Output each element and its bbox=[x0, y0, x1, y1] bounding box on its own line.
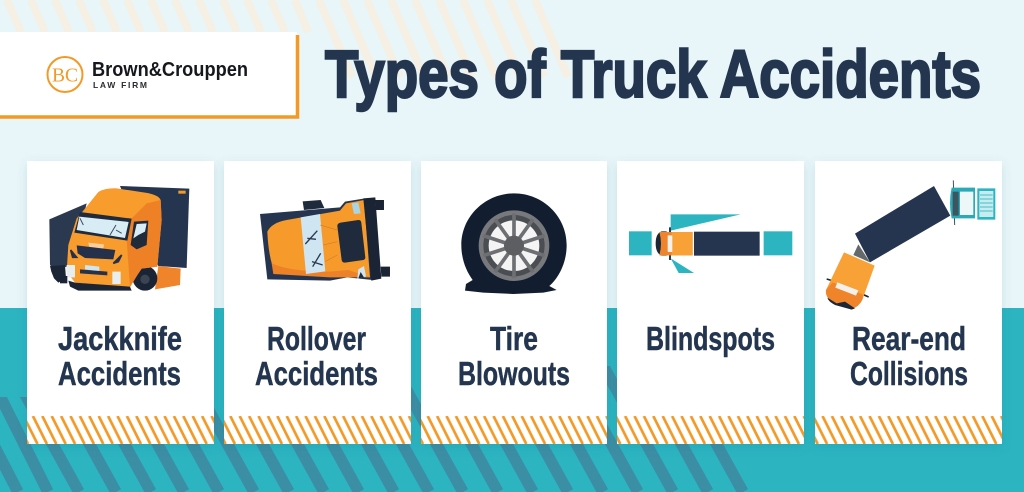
label: Rollover Accidents: Rollover bbox=[267, 321, 366, 358]
label: Jackknife Accidents: Jackknife bbox=[58, 321, 182, 358]
label: Jackknife Accidents bbox=[58, 321, 182, 393]
label: Tire Blowouts bbox=[458, 321, 570, 393]
label: Tire Blowouts: Blowouts bbox=[458, 356, 570, 393]
label: Rear-end Collisions: Collisions bbox=[850, 356, 968, 393]
logo wordmark bbox=[92, 59, 248, 90]
label: Rollover Accidents bbox=[255, 321, 378, 393]
icon: overturned truck bbox=[260, 197, 390, 281]
icon: flat tire bbox=[461, 193, 567, 294]
label: Rollover Accidents: Accidents bbox=[255, 356, 378, 393]
label: Rear-end Collisions: Rear-end bbox=[852, 321, 966, 358]
logo wordmark: LAW FIRM bbox=[93, 80, 147, 90]
logo panel bbox=[0, 32, 298, 117]
panel: tire blowouts bbox=[421, 161, 607, 444]
label: Tire Blowouts: Tire bbox=[490, 321, 538, 358]
panel: rear-end collisions bbox=[815, 161, 1002, 444]
panel: jackknife accidents bbox=[27, 161, 214, 444]
icon: jackknifed truck bbox=[49, 186, 189, 291]
label: Rear-end Collisions bbox=[850, 321, 968, 393]
icon: truck with blind spot zones bbox=[629, 214, 792, 273]
panel: blindspots bbox=[617, 161, 804, 444]
label: Jackknife Accidents: Accidents bbox=[58, 356, 181, 393]
icon: BC logo mark bbox=[48, 57, 82, 92]
label: Blindspots: Blindspots bbox=[646, 321, 775, 358]
panel: rollover accidents bbox=[224, 161, 411, 444]
logo wordmark: Brown&Crouppen bbox=[92, 59, 248, 81]
icon: BC logo mark: BC bbox=[52, 64, 78, 86]
icon: rear-end collision trucks bbox=[826, 180, 995, 310]
